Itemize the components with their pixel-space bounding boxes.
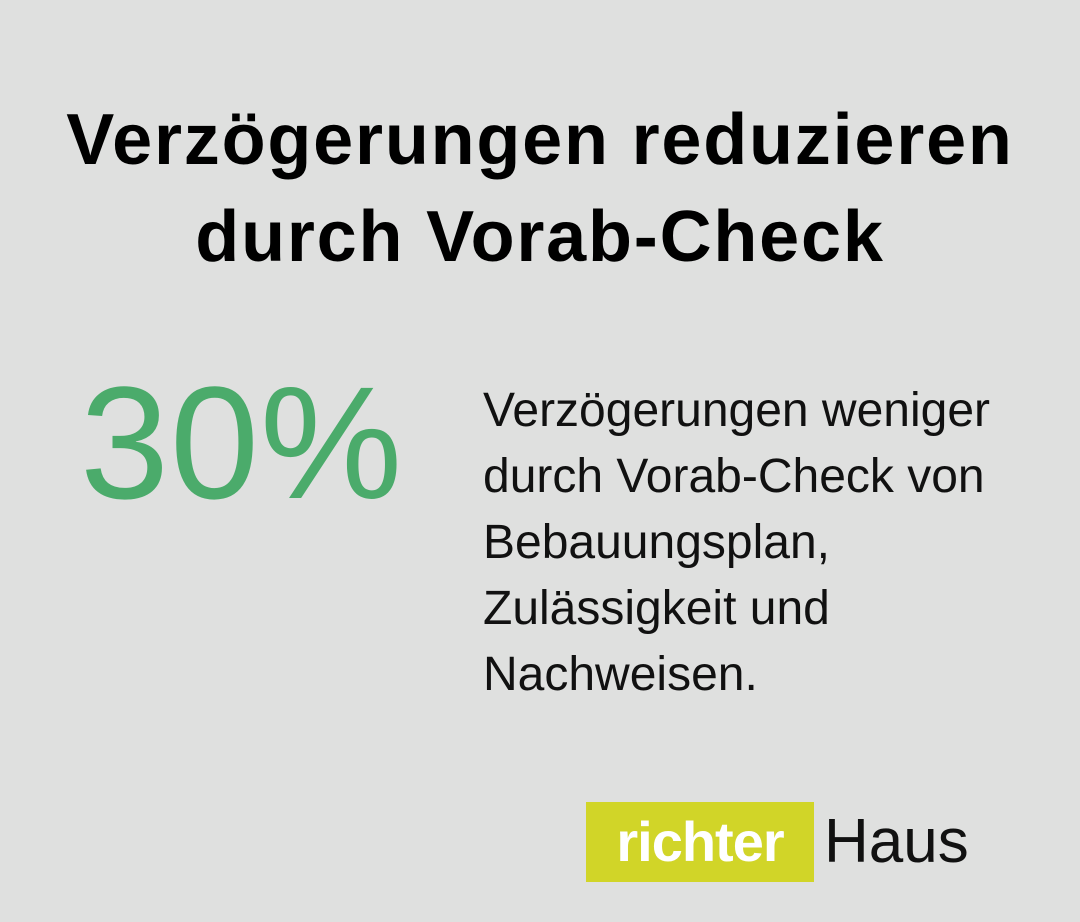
- logo: richter: richter: [616, 810, 784, 873]
- logo: Haus: Haus: [824, 807, 969, 876]
- title: [66, 100, 1014, 277]
- description text: durch Vorab-Check von: [483, 450, 985, 503]
- description text: Zulässigkeit und: [483, 582, 830, 635]
- title: durch Vorab-Check: [195, 197, 885, 277]
- title: Verzögerungen reduzieren: [66, 100, 1014, 180]
- description text: Verzögerungen weniger: [483, 384, 990, 437]
- description text: Nachweisen.: [483, 648, 758, 701]
- description text: [483, 384, 990, 701]
- description text: Bebauungsplan,: [483, 516, 830, 569]
- statistic: 30%: 30%: [80, 353, 403, 532]
- logo: richter: [586, 802, 814, 882]
